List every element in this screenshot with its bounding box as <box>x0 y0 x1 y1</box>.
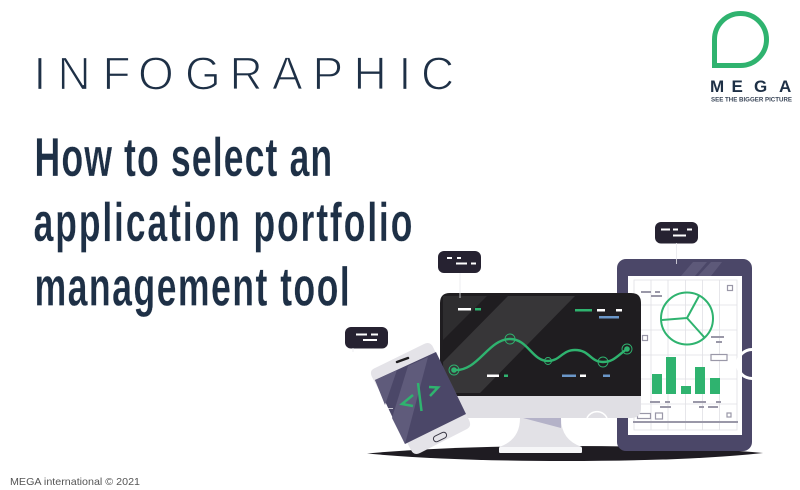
phone button <box>432 431 448 443</box>
tablet home button <box>736 348 752 380</box>
monitor labels <box>458 308 622 377</box>
phone speaker <box>397 358 408 362</box>
logo: MEGA <box>710 14 792 104</box>
title: INFOGRAPHIC: INFOGRAPHIC <box>34 47 454 99</box>
monitor bezel <box>440 293 641 396</box>
speech bubble: monitor <box>438 251 481 298</box>
phone screen <box>375 352 466 444</box>
monitor base <box>499 447 582 453</box>
illustration: tablet <box>617 259 752 451</box>
phone body <box>371 343 470 454</box>
heading: how to select an application portfolio management tool <box>34 126 412 317</box>
icon: speech drop <box>714 14 766 66</box>
code icon <box>402 383 438 411</box>
illustration: phone <box>371 343 470 454</box>
footer copyright: MEGA international © 2021 <box>10 476 140 488</box>
speech bubble: tablet <box>655 222 698 264</box>
tablet placeholder boxes <box>638 286 732 419</box>
logo tagline: SEE THE BIGGER PICTURE <box>711 98 792 104</box>
speech bubble: phone <box>345 327 388 352</box>
tablet screen <box>628 276 742 435</box>
tablet placeholder labels <box>633 291 738 423</box>
screen highlights <box>443 296 487 340</box>
monitor chin <box>440 396 641 418</box>
ground shadow <box>367 446 763 461</box>
line chart <box>449 334 632 375</box>
heading: how to select an application portfolio management tool: management tool <box>34 256 350 317</box>
monitor stand <box>499 418 582 447</box>
bar chart <box>652 357 720 394</box>
heading: how to select an application portfolio management tool: application portfolio <box>34 191 412 253</box>
pie chart <box>661 292 713 344</box>
heading: how to select an application portfolio management tool: How to select an <box>34 126 332 188</box>
illustration: monitor <box>440 293 641 453</box>
logo wordmark: MEGA <box>710 77 791 96</box>
tablet body <box>617 259 752 451</box>
